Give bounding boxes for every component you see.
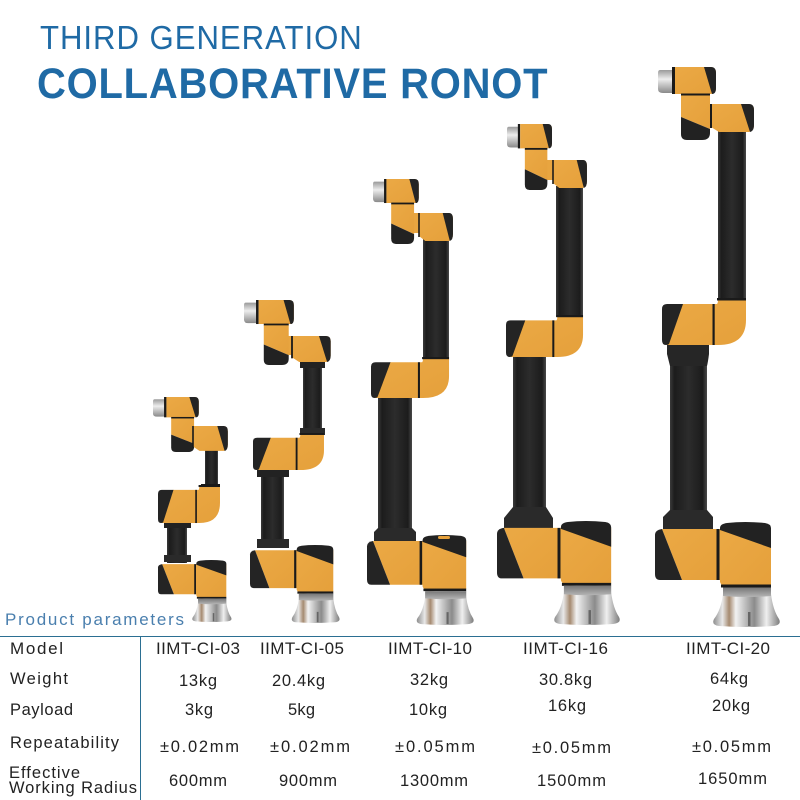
row: effective working radius [9, 764, 767, 797]
row: model: Model [10, 639, 63, 658]
row: payload: 20kg [712, 697, 750, 715]
row: model: IIMT-CI-20 [686, 639, 770, 658]
row: effective working radius: 600mm [169, 772, 227, 790]
row: payload: 5kg [288, 701, 315, 719]
robot arm: IIMT-CI-03 [153, 397, 231, 622]
row: repeatability: ±0.02mm [270, 738, 350, 756]
row: model: IIMT-CI-16 [523, 639, 608, 658]
row: payload [10, 697, 750, 719]
heading: product parameters: Product parameters [5, 610, 184, 629]
row: payload: 3kg [185, 701, 213, 719]
row: model: IIMT-CI-05 [260, 639, 344, 658]
row: effective working radius: 1300mm [400, 772, 468, 790]
row: effective working radius: Effective [9, 764, 80, 782]
robot arm: IIMT-CI-20 [655, 67, 780, 627]
row: repeatability: ±0.05mm [395, 738, 475, 756]
robot arm: IIMT-CI-10 [367, 179, 474, 625]
title: third generation: THIRD GENERATION [40, 19, 362, 56]
row: repeatability: ±0.05mm [532, 739, 611, 757]
row: model: IIMT-CI-10 [388, 639, 472, 658]
table: product parameters [0, 636, 800, 800]
row: effective working radius: 900mm [279, 772, 337, 790]
row: payload: 16kg [548, 697, 586, 715]
row: weight: 13kg [179, 672, 217, 690]
row: weight: 30.8kg [539, 671, 592, 689]
robot arm: IIMT-CI-05 [244, 300, 340, 623]
row: repeatability [10, 734, 771, 757]
row: weight [10, 670, 748, 690]
row: effective working radius: Working Radius [9, 779, 137, 797]
row: model: IIMT-CI-03 [156, 639, 240, 658]
row: weight: 64kg [710, 670, 748, 688]
title: collaborative ronot: COLLABORATIVE RONOT [37, 59, 548, 107]
row: weight: 32kg [410, 671, 448, 689]
row: repeatability: ±0.05mm [692, 738, 771, 756]
robot arm: IIMT-CI-16 [497, 124, 620, 625]
row: model [10, 639, 770, 658]
row: weight: Weight [10, 670, 68, 688]
row: repeatability: ±0.02mm [160, 738, 239, 756]
row: payload: Payload [10, 701, 73, 719]
row: effective working radius: 1650mm [698, 770, 767, 788]
row: weight: 20.4kg [272, 672, 325, 690]
row: repeatability: Repeatability [10, 734, 120, 752]
row: payload: 10kg [409, 701, 447, 719]
row: effective working radius: 1500mm [537, 772, 606, 790]
